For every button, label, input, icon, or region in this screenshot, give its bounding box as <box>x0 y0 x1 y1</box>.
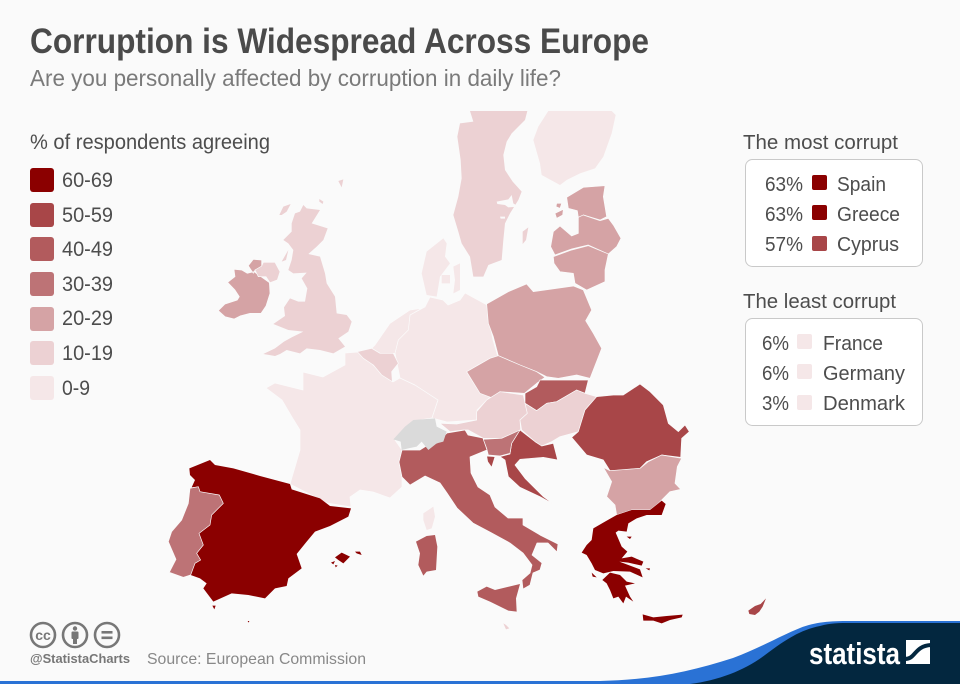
Sardinia <box>416 535 437 576</box>
Northern Ireland <box>255 262 280 283</box>
footer swoosh <box>0 621 960 684</box>
Austria <box>440 392 527 438</box>
icon: no derivatives <box>95 623 119 647</box>
Switzerland <box>393 418 447 450</box>
row: Cyprus 57%: Cyprus <box>837 234 899 256</box>
legend item 10-19: 10-19 <box>62 342 113 365</box>
row: Germany 6%: 6% <box>762 363 789 385</box>
row: Greece 63%: Greece <box>837 204 900 226</box>
row: Germany 6% <box>762 363 905 385</box>
Northern-east group: Scandinavia, Baltics, Poland, Czechia <box>453 111 621 398</box>
title: Corruption is Widespread Across Europe <box>30 22 649 61</box>
Malta <box>503 623 509 629</box>
Poland <box>487 284 602 378</box>
panel box <box>746 160 922 266</box>
row: Denmark 3%: 3% <box>762 393 789 415</box>
map of Europe <box>168 111 766 629</box>
Bulgaria <box>603 455 682 515</box>
legend item 10-19 <box>30 341 113 365</box>
subtitle: Are you personally affected by corruption in daily life? <box>30 65 561 91</box>
Swedish lakes <box>497 195 518 219</box>
row: Spain 63%: 63% <box>765 174 803 196</box>
Lithuania <box>553 246 608 290</box>
Sweden <box>453 111 527 277</box>
statista logo <box>809 636 931 671</box>
Greece <box>582 501 683 623</box>
icon: cc: cc <box>35 627 51 643</box>
Slovenia <box>483 430 520 456</box>
legend item 20-29: 20-29 <box>62 307 113 330</box>
legend item 50-59 <box>30 203 113 227</box>
row: Denmark 3%: Denmark <box>823 393 906 415</box>
legend item 0-9 <box>30 376 90 400</box>
logo wordmark: statista <box>809 636 901 671</box>
icon: creative commons licence badges <box>31 623 119 647</box>
Sicily <box>477 584 520 612</box>
Belgium <box>357 348 398 382</box>
Latvia <box>551 215 621 255</box>
legend: % of respondents agreeing <box>30 131 270 400</box>
United Kingdom <box>263 179 352 356</box>
legend item 60-69: 60-69 <box>62 169 113 192</box>
row: Greece 63%: 63% <box>765 204 803 226</box>
Gotland <box>523 227 528 244</box>
Spain <box>189 460 351 602</box>
legend item 20-29 <box>30 307 113 331</box>
icon: attribution person <box>63 623 87 647</box>
row: Germany 6%: Germany <box>823 363 905 385</box>
legend item 30-39 <box>30 272 113 296</box>
blue line and wave <box>0 621 960 684</box>
row: Cyprus 57% <box>765 234 899 256</box>
panel heading: The most corrupt <box>743 132 898 154</box>
France <box>266 352 438 507</box>
legend item 0-9: 0-9 <box>62 377 90 400</box>
dark wave <box>690 623 960 684</box>
Slovakia <box>525 380 588 411</box>
Czech Republic <box>467 356 545 398</box>
Italy <box>399 430 558 589</box>
row: France 6% <box>762 333 883 355</box>
Ireland <box>218 259 270 319</box>
South-west group: Iberia and western Mediterranean <box>168 418 447 623</box>
Northern-west group: Britain and Ireland, Belgium, Netherlands, Denmark <box>218 179 460 382</box>
Hungary <box>520 390 597 446</box>
Portugal <box>168 487 223 577</box>
Germany <box>395 293 498 422</box>
row: France 6%: 6% <box>762 333 789 355</box>
legend item 60-69 <box>30 168 113 192</box>
row: Greece 63% <box>765 204 900 226</box>
Corsica <box>423 507 435 530</box>
legend heading: % of respondents agreeing <box>30 131 270 154</box>
panel: the most corrupt <box>743 132 922 266</box>
Cyprus <box>748 598 766 615</box>
panel: the least corrupt <box>743 291 922 426</box>
legend item 30-39: 30-39 <box>62 273 113 296</box>
Estonia <box>555 186 607 220</box>
row: France 6%: France <box>823 333 883 355</box>
Denmark <box>422 238 460 297</box>
panel heading: The least corrupt <box>743 291 896 313</box>
legend item 40-49: 40-49 <box>62 238 113 261</box>
social handle: @StatistaCharts <box>30 651 130 666</box>
row: Spain 63% <box>765 174 886 196</box>
row: Cyprus 57%: 57% <box>765 234 803 256</box>
South-east group: central Europe, Balkans, Greece, Cyprus <box>440 380 766 629</box>
row: Spain 63%: Spain <box>837 174 886 196</box>
source note: Source: European Commission <box>147 651 366 668</box>
legend item 50-59: 50-59 <box>62 204 113 227</box>
Croatia <box>487 430 558 504</box>
row: Denmark 3% <box>762 393 906 415</box>
Finland <box>533 111 616 185</box>
panel box <box>746 318 922 426</box>
Romania <box>572 384 689 471</box>
legend item 40-49 <box>30 237 113 261</box>
logo mark <box>905 640 931 664</box>
Balearic Islands and Ceuta <box>212 552 362 623</box>
Netherlands <box>372 308 422 353</box>
